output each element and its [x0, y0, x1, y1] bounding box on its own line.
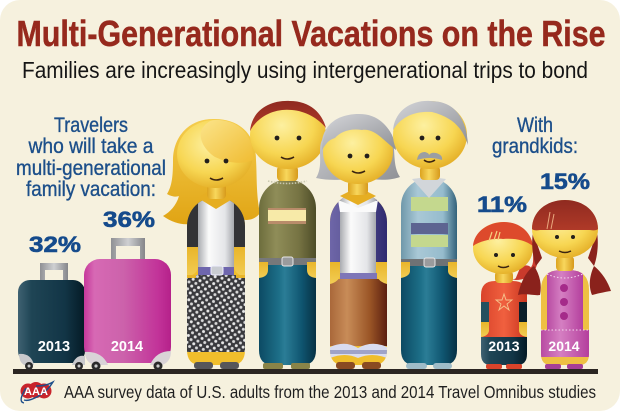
stat: 32%: 32%: [29, 232, 81, 257]
stat: 36%: 36%: [103, 207, 155, 232]
suitcase 2013: 2013: [38, 339, 70, 355]
icon: AAA logo: AAA: [24, 386, 48, 398]
suitcase 2014: [84, 238, 171, 370]
text: travelers label: who will take a: [28, 135, 154, 158]
stat: 11%: 11%: [477, 192, 527, 217]
text: travelers label: multi-generational: [16, 157, 166, 180]
figure: grandfather: [393, 101, 468, 369]
text: travelers label: Travelers: [54, 114, 128, 137]
suitcase 2013: [18, 263, 85, 370]
text: travelers label: [16, 114, 166, 201]
suitcase 2014: 2014: [111, 339, 143, 355]
icon: star: [496, 294, 512, 310]
ground line: [13, 369, 598, 374]
text: travelers label: family vacation:: [26, 178, 156, 201]
figure: blonde woman: [163, 119, 260, 370]
figure: man: [250, 101, 326, 369]
text: with grandkids label: [492, 114, 578, 158]
figure: older grandchild: 2014: [548, 338, 580, 354]
text: with grandkids label: With: [517, 114, 553, 137]
stat: 15%: 15%: [540, 169, 590, 194]
figure: older grandchild: [518, 200, 611, 369]
text: with grandkids label: grandkids:: [492, 135, 578, 158]
figure: grandmother: [316, 114, 400, 370]
icon: AAA logo: [20, 382, 53, 403]
figure: younger grandchild: 2013: [488, 338, 520, 354]
figure: younger grandchild: [473, 222, 538, 369]
